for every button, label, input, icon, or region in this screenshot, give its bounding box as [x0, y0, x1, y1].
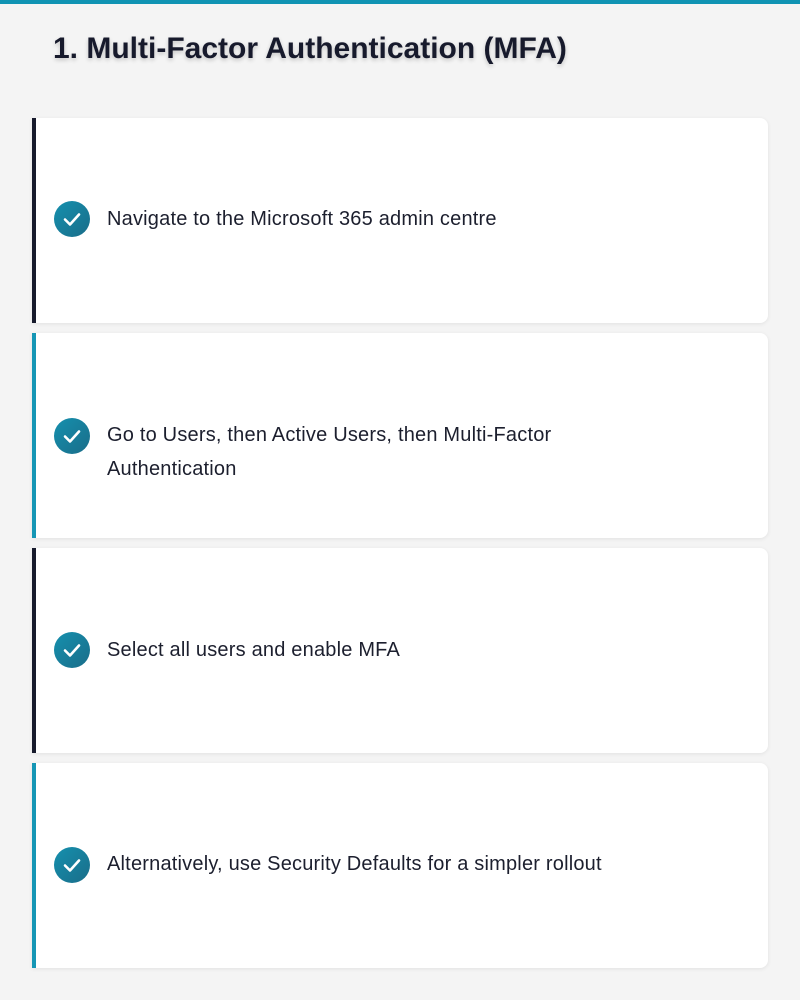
icon: check — [54, 418, 90, 454]
text: Go to Users, then Active Users, then Multi-Factor Authentication — [107, 424, 551, 480]
text: Alternatively, use Security Defaults for a simpler rollout — [107, 853, 602, 875]
icon: check — [54, 201, 90, 237]
card 2 — [32, 333, 768, 538]
icon: check — [54, 847, 90, 883]
card 3 — [32, 548, 768, 753]
card 4 — [32, 763, 768, 968]
text: Select all users and enable MFA — [107, 639, 400, 661]
title: 1. Multi-Factor Authentication (MFA) — [53, 32, 567, 65]
card 1 — [32, 118, 768, 323]
icon: check — [54, 632, 90, 668]
text: Navigate to the Microsoft 365 admin centre — [107, 208, 497, 230]
